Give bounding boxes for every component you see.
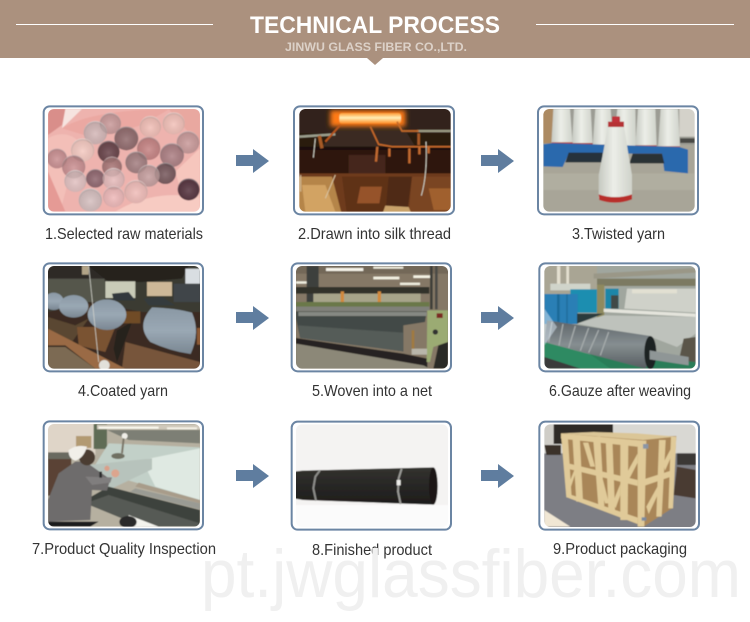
photo: glass marbles xyxy=(42,105,204,216)
arrow xyxy=(481,306,514,330)
header banner xyxy=(0,0,750,65)
photo: weaving loom xyxy=(290,262,452,372)
caption: 3.Twisted yarn xyxy=(572,226,665,243)
arrow xyxy=(481,464,514,488)
arrow xyxy=(481,149,514,173)
caption: 1.Selected raw materials xyxy=(44,226,202,243)
photo: finished black roll xyxy=(290,420,452,531)
photo: wooden crate xyxy=(538,420,700,531)
subtitle: JINWU GLASS FIBER CO.,LTD. xyxy=(285,40,467,54)
arrow xyxy=(236,306,269,330)
photo: gauze roll xyxy=(538,262,700,372)
panel: step 9 xyxy=(538,420,700,558)
caption: 7.Product Quality Inspection xyxy=(32,541,216,558)
panel: step 5 xyxy=(290,262,452,400)
photo: coated yarn rolls xyxy=(42,262,204,372)
panel: step 8 xyxy=(290,420,452,559)
caption: 6.Gauze after weaving xyxy=(549,383,691,400)
photo: quality inspection xyxy=(42,420,204,530)
caption: 8.Finished product xyxy=(312,542,432,559)
caption: 9.Product packaging xyxy=(553,541,687,558)
arrow xyxy=(236,464,269,488)
caption: 2.Drawn into silk thread xyxy=(298,226,451,243)
photo: furnace drawing xyxy=(293,105,455,216)
title: TECHNICAL PROCESS xyxy=(250,12,500,39)
panel: step 3 xyxy=(537,105,699,243)
photo: twisted yarn cones xyxy=(537,105,699,216)
caption: 5.Woven into a net xyxy=(312,383,432,400)
panel: step 1 xyxy=(42,105,204,243)
caption: 4.Coated yarn xyxy=(78,383,168,400)
arrow xyxy=(236,149,269,173)
panel: step 7 xyxy=(32,420,216,558)
panel: step 6 xyxy=(538,262,700,400)
panel: step 2 xyxy=(293,105,455,243)
panel: step 4 xyxy=(42,262,204,400)
